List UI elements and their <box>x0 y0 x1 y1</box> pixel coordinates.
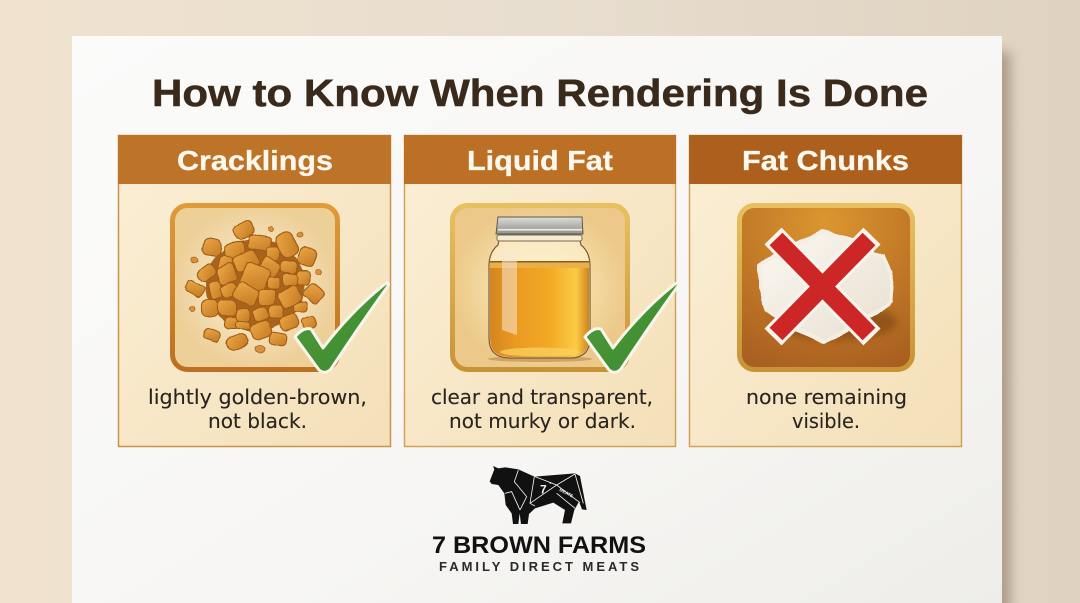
liquid meniscus <box>490 262 589 268</box>
icon: cow silhouette: ° <box>549 482 551 488</box>
jar glass <box>489 240 590 358</box>
icon: green check mark <box>585 283 679 372</box>
icon: cow silhouette: 7 <box>540 482 547 496</box>
panel heading: Cracklings <box>177 145 333 176</box>
panel background <box>404 136 676 446</box>
glass highlight <box>502 250 517 335</box>
panel caption: lightly golden-brown, <box>148 385 367 409</box>
panel background <box>690 136 962 446</box>
panel heading: Fat Chunks <box>742 145 909 176</box>
lid band <box>498 229 582 230</box>
jar base glow <box>500 348 580 356</box>
panel caption: clear and transparent, <box>431 385 653 409</box>
logo: 7 Brown Farms <box>432 466 646 574</box>
chunk shadow <box>773 304 897 340</box>
icon frame <box>452 206 628 370</box>
jar lid <box>496 217 583 234</box>
panel header <box>404 135 676 184</box>
jar liquid <box>490 262 589 357</box>
panel background <box>118 136 390 446</box>
icon: cow silhouette <box>490 466 587 524</box>
icon: jar of liquid fat <box>488 217 592 362</box>
panel: liquid fat <box>404 135 679 446</box>
icon: cow silhouette: MEATS <box>559 487 574 499</box>
icon frame <box>740 206 912 370</box>
brand tagline: FAMILY DIRECT MEATS <box>439 559 639 574</box>
title: How to Know When Rendering Is Done <box>152 73 928 115</box>
panel: cracklings <box>118 135 391 446</box>
panel caption: not black. <box>208 409 307 433</box>
panel header <box>689 135 962 184</box>
panel header <box>118 135 391 184</box>
brand name: 7 BROWN FARMS <box>432 532 646 559</box>
icon: red cross <box>773 236 872 337</box>
panel caption: not murky or dark. <box>449 409 636 433</box>
panel caption: none remaining <box>746 385 907 409</box>
jar shadow <box>488 356 592 362</box>
icon: green check mark <box>295 283 389 372</box>
card shadow <box>992 52 1010 603</box>
liquid surface <box>490 261 589 262</box>
panel caption: visible. <box>792 409 860 433</box>
panel: fat chunks <box>689 135 962 446</box>
icon frame <box>172 206 338 370</box>
lid collar <box>497 235 582 241</box>
icon: white fat chunk <box>760 232 891 342</box>
panel heading: Liquid Fat <box>467 145 613 176</box>
icon: cracklings pile <box>184 219 326 352</box>
